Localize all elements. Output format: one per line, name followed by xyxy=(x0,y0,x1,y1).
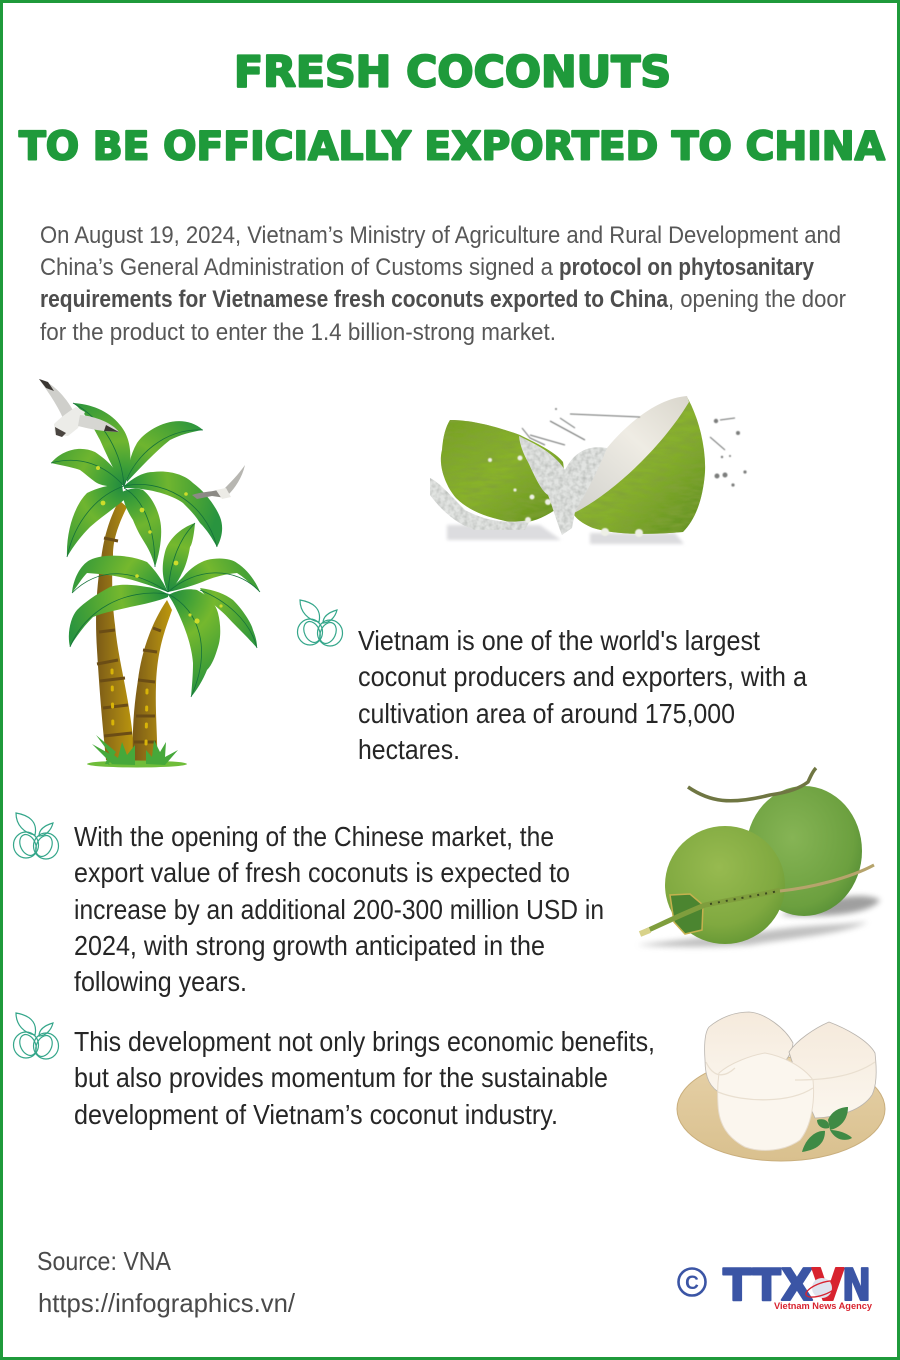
shadows xyxy=(637,922,868,947)
source text xyxy=(37,1246,296,1318)
intro text block xyxy=(40,222,846,346)
title: TO BE OFFICIALLY EXPORTED TO CHINA xyxy=(19,124,885,170)
lower palm fronds xyxy=(69,523,260,697)
mint leaves xyxy=(802,1107,852,1152)
text block: producers: Vietnam is one of the world's largest xyxy=(358,625,760,656)
source text: https://infographics.vn/ xyxy=(38,1288,296,1318)
front peeled coconut xyxy=(718,1053,814,1150)
water streaks and droplets xyxy=(488,408,747,537)
text block: economic benefits: This development not only brings economic benefits, xyxy=(74,1026,655,1057)
agency wordmark xyxy=(723,1260,871,1311)
reflection xyxy=(447,525,684,544)
photo: split green coconut with water splash xyxy=(430,396,747,544)
text block: export value: export value of fresh coconuts is expected to xyxy=(74,857,570,888)
text block: economic benefits: development of Vietnam’s coconut industry. xyxy=(74,1099,558,1130)
calyx patch xyxy=(670,894,703,934)
text block: export value: following years. xyxy=(74,966,247,997)
stems xyxy=(642,890,780,933)
palm trunks xyxy=(96,500,172,762)
source text: Source: VNA xyxy=(37,1246,172,1276)
text block: producers: coconut producers and exporters, with a xyxy=(358,661,808,692)
back left peeled coconut xyxy=(705,1012,793,1094)
agency tagline: Vietnam News Agency xyxy=(774,1301,872,1311)
text block: export value: With the opening of the Chinese market, the xyxy=(74,821,554,852)
photo: two green coconuts xyxy=(637,768,880,947)
text block: producers: hectares. xyxy=(358,734,460,765)
coconut flesh xyxy=(562,396,689,513)
title: FRESH COCONUTS xyxy=(234,48,671,98)
agency wordmark: N xyxy=(842,1260,871,1311)
text block: producers: cultivation area of around 175,000 xyxy=(358,698,735,729)
right coconut half xyxy=(573,397,705,534)
agency wordmark: V xyxy=(812,1260,844,1311)
icon: coconut bullet 3 xyxy=(14,1013,58,1059)
text block: producers xyxy=(358,625,808,765)
logo: TTXVN Vietnam News Agency xyxy=(678,1260,872,1311)
text block: export value xyxy=(74,821,604,997)
copyright symbol: C xyxy=(685,1273,699,1294)
intro text block: China’s General Administration of Customs signed a xyxy=(40,254,553,281)
intro text block: , opening the door xyxy=(668,286,846,313)
text block: export value: increase by an additional 200-300 million USD in xyxy=(74,894,604,925)
water splash xyxy=(430,436,607,535)
intro text block: requirements for Vietnamese fresh coconuts exported to China xyxy=(40,286,668,313)
text block: economic benefits xyxy=(74,1026,655,1130)
agency wordmark: TTX xyxy=(723,1260,813,1311)
seagull top left xyxy=(39,379,119,437)
left coconut half xyxy=(441,420,564,523)
intro text block: for the product to enter the 1.4 billion-strong market. xyxy=(40,319,556,346)
icon: coconut bullet 2 xyxy=(14,813,58,859)
icon: coconut bullet 1 xyxy=(298,600,342,646)
back right peeled coconut xyxy=(789,1022,876,1118)
back coconut xyxy=(746,786,862,916)
globe xyxy=(804,1278,840,1300)
grass xyxy=(87,735,187,768)
photo: peeled coconuts on a plate xyxy=(677,1012,885,1161)
title xyxy=(19,48,885,170)
front coconut xyxy=(665,826,785,944)
plate xyxy=(677,1057,885,1161)
illustration: palm trees with seagulls xyxy=(39,379,260,768)
copyright symbol xyxy=(678,1268,706,1296)
seagull right xyxy=(192,465,245,499)
intro text block: protocol on phytosanitary xyxy=(559,254,814,281)
upper palm fronds xyxy=(51,403,222,567)
text block: export value: 2024, with strong growth anticipated in the xyxy=(74,930,545,961)
text block: economic benefits: but also provides momentum for the sustainable xyxy=(74,1062,608,1093)
